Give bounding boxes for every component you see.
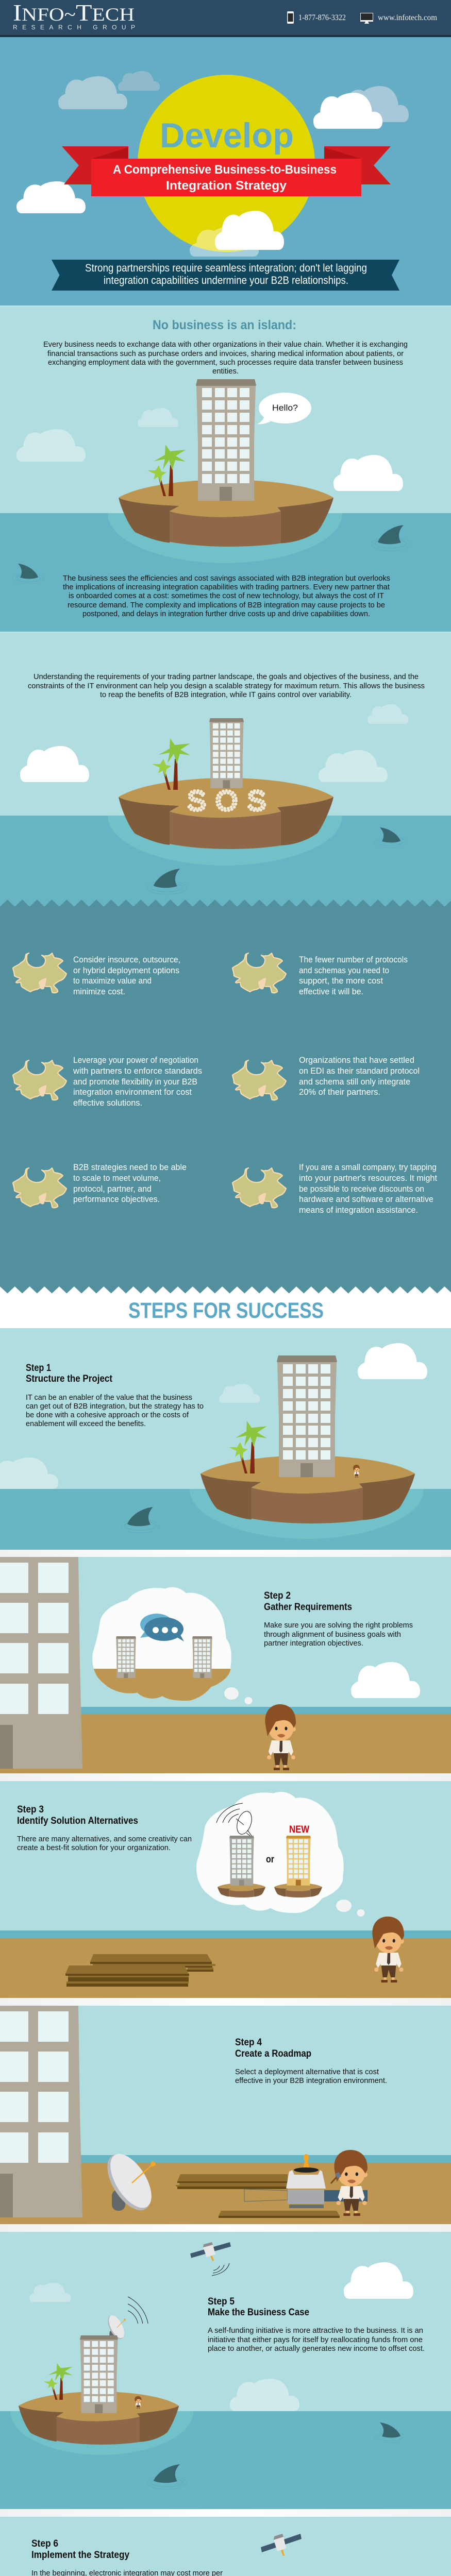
shark lower xyxy=(147,2464,187,2489)
step text: Step 6 xyxy=(31,2538,58,2549)
planks xyxy=(176,2174,340,2218)
step text: be done with a cohesive approach or the costs of xyxy=(26,1411,189,1419)
tip 2: and schemas you need to xyxy=(299,966,389,975)
tip 4: on EDI as their standard protocol xyxy=(299,1066,420,1076)
clouds xyxy=(16,408,403,491)
step text xyxy=(235,2037,387,2085)
person xyxy=(353,1465,360,1478)
cloud back right xyxy=(340,86,409,122)
person xyxy=(372,1917,404,1982)
tip 3: effective solutions. xyxy=(73,1098,142,1108)
red ribbon xyxy=(62,146,391,196)
body text: the implications of increasing integration capabilities with trading partners. Every new partner that xyxy=(63,583,390,591)
panel: step 1 xyxy=(0,1328,451,1550)
panel: teal tips xyxy=(0,900,451,1294)
or label: or xyxy=(266,1854,275,1865)
step text: Structure the Project xyxy=(26,1374,113,1384)
tip 6: hardware and software or alternative xyxy=(299,1195,433,1204)
speech bubble: Hello? xyxy=(272,403,298,413)
step text: through alignment of business goals with xyxy=(264,1631,401,1639)
step text: create a best-fit solution for your organization. xyxy=(17,1844,171,1852)
body text xyxy=(28,673,425,699)
SOS rocks: SOS xyxy=(187,785,266,817)
dish xyxy=(105,2313,127,2342)
satellite dish xyxy=(98,2147,160,2217)
body text: constraints of the IT environment can help you design a scalable strategy for maximum return. This allows the business xyxy=(28,682,425,690)
intro text: exchanging employment data with the government, such processes require data transfer between business xyxy=(48,359,403,367)
body text: resource demand. The complexity and implications of B2B integration may cause projects to be xyxy=(68,601,385,609)
subtitle: Integration Strategy xyxy=(166,179,287,193)
building xyxy=(277,1355,337,1477)
option B island xyxy=(274,1883,322,1897)
website: www.infotech.com xyxy=(378,13,438,22)
header bar xyxy=(0,0,451,37)
tip 6: If you are a small company, try tapping xyxy=(299,1163,437,1172)
body text: postponed, and delays in integration further drive costs up and drive capabilities down. xyxy=(82,610,370,618)
step text: Select a deployment alternative that is cost xyxy=(235,2068,379,2076)
tagline banner: integration capabilities undermine your B2B relationships. xyxy=(104,275,348,286)
heading: No business is an island: xyxy=(153,318,296,332)
small building right xyxy=(192,1636,212,1678)
satellite waves xyxy=(212,2263,229,2276)
satellite under construction xyxy=(286,2154,326,2208)
dish with waves xyxy=(216,1803,254,1836)
step text: Make the Business Case xyxy=(208,2307,309,2318)
island halo xyxy=(190,1489,424,1539)
tip 4: Organizations that have settled xyxy=(299,1056,414,1065)
tip 3: integration environment for cost xyxy=(73,1088,192,1097)
panel: hero sky xyxy=(0,37,451,306)
step text: can get out of B2B integration, but the strategy has to xyxy=(26,1402,204,1411)
tip 3: and promote flexibility in your B2B xyxy=(73,1077,197,1087)
intro text: entities. xyxy=(212,367,239,376)
subtitle xyxy=(113,163,337,193)
tip 1: to maximize value and xyxy=(73,976,152,986)
tip 2: The fewer number of protocols xyxy=(299,955,408,964)
waves xyxy=(128,2297,148,2324)
cloud small xyxy=(118,71,160,91)
body text: Understanding the requirements of your trading partner landscape, the goals and objectives of the business, and the xyxy=(34,673,419,681)
tip 2: support, the more cost xyxy=(299,976,383,986)
tip 5: B2B strategies need to be able xyxy=(73,1163,187,1172)
step text: initiative that either pays for itself by reallocating funds from one xyxy=(208,2336,423,2344)
island xyxy=(201,1455,415,1523)
tip 2: effective it will be. xyxy=(299,987,363,996)
island halo xyxy=(108,816,342,866)
tagline banner xyxy=(52,260,399,291)
tip 5 xyxy=(13,1163,187,1208)
tip 6: into your partner's resources. It might xyxy=(299,1174,437,1183)
panel: step 5 xyxy=(0,2232,451,2509)
step text: Create a Roadmap xyxy=(235,2048,311,2059)
speech bubble xyxy=(257,393,311,424)
clouds xyxy=(20,704,408,782)
body text: to reap the benefits of B2B integration, while IT gains control over variability. xyxy=(100,691,352,699)
step text: enablement will exceed the benefits. xyxy=(26,1420,146,1428)
island xyxy=(119,778,333,849)
intro text: Every business needs to exchange data with other organizations in their value chain. Whether it is exchanging xyxy=(43,341,408,349)
step text: A self-funding initiative is more attractive to the business. It is an xyxy=(208,2327,423,2335)
step text: Step 1 xyxy=(26,1363,51,1374)
intro text xyxy=(43,341,408,376)
person xyxy=(135,2396,141,2409)
building xyxy=(209,718,244,788)
step text xyxy=(31,2538,224,2576)
logo: RESEARCH GROUP xyxy=(13,24,135,31)
satellite xyxy=(261,2534,302,2556)
tip 4: 20% of their partners. xyxy=(299,1088,380,1097)
step text xyxy=(17,1804,192,1852)
shark right xyxy=(371,525,410,551)
tip 1: or hybrid deployment options xyxy=(73,966,179,975)
tip 2 xyxy=(232,953,408,996)
panel: step 3 xyxy=(0,1781,451,1998)
icon: speech bubbles xyxy=(140,1614,184,1641)
solar panel xyxy=(324,2190,368,2201)
shark right xyxy=(375,827,406,848)
cloud xyxy=(58,76,127,109)
logo: INFO~ TECH xyxy=(13,0,135,26)
step text: effective in your B2B integration environment. xyxy=(235,2077,387,2085)
tip 3: Leverage your power of negotiation xyxy=(73,1056,198,1065)
tip 3 xyxy=(13,1056,202,1108)
shark left xyxy=(147,869,187,894)
step text: IT can be an enabler of the value that the business xyxy=(26,1394,192,1402)
cloud white left xyxy=(16,181,86,213)
body text: The business sees the efficiencies and cost savings associated with B2B integration but overlooks xyxy=(63,574,390,583)
divider band xyxy=(0,2509,451,2517)
option A island xyxy=(218,1883,265,1897)
tip 6: be possible to receive discounts on xyxy=(299,1184,424,1194)
tip 1 xyxy=(13,953,180,996)
island halo xyxy=(108,513,342,563)
clouds xyxy=(29,2262,413,2411)
tip 3: with partners to enforce standards xyxy=(73,1066,202,1076)
tip 5: to scale to meet volume, xyxy=(73,1174,161,1183)
tip 5: performance objectives. xyxy=(73,1195,160,1204)
clouds xyxy=(0,1343,427,1489)
island xyxy=(19,2392,179,2445)
divider band xyxy=(0,1998,451,2006)
body text xyxy=(63,574,390,618)
palm trees xyxy=(229,1421,267,1473)
step text: Step 4 xyxy=(235,2037,262,2048)
step text xyxy=(264,1590,413,1648)
subtitle: A Comprehensive Business-to-Business xyxy=(113,163,337,177)
step text: partner integration objectives. xyxy=(264,1639,363,1648)
title: Develop: Develop xyxy=(160,116,294,155)
tagline banner: Strong partnerships require seamless integration; don't let lagging xyxy=(85,262,367,274)
sun xyxy=(138,75,315,252)
cloud white centre xyxy=(215,211,284,250)
small building left xyxy=(116,1636,136,1678)
panel: SOS island xyxy=(0,632,451,906)
palm trees xyxy=(147,445,186,496)
option A building xyxy=(229,1836,254,1886)
icon: monitor xyxy=(360,13,373,24)
step text: Implement the Strategy xyxy=(31,2550,129,2561)
phone number: 1-877-876-3322 xyxy=(298,13,346,22)
tip 4: and schema still only integrate xyxy=(299,1077,410,1087)
palm trees xyxy=(152,738,190,790)
building xyxy=(80,2335,118,2413)
thought cloud xyxy=(92,1587,253,1704)
thought cloud xyxy=(196,1792,365,1917)
palm trees xyxy=(43,2363,72,2400)
step text: Step 5 xyxy=(208,2296,235,2307)
NEW label: NEW xyxy=(289,1824,309,1835)
step text xyxy=(208,2296,425,2353)
panel: step 4 xyxy=(0,2006,451,2224)
island xyxy=(119,480,333,547)
divider band xyxy=(0,2224,451,2232)
step text: place to another, or actually generates new income to offset cost. xyxy=(208,2345,425,2353)
shark xyxy=(121,1507,160,1533)
intro text: financial transactions such as purchase orders and invoices, sharing medical information about patients, or xyxy=(47,350,404,358)
shark left xyxy=(13,564,43,584)
heading: steps for success: STEPS FOR SUCCESS xyxy=(128,1298,324,1323)
satellite xyxy=(190,2242,231,2261)
tip 1: minimize cost. xyxy=(73,987,125,996)
step text: Step 2 xyxy=(264,1590,291,1601)
person with hammer xyxy=(331,2150,368,2216)
step text: Step 3 xyxy=(17,1804,44,1815)
divider band xyxy=(0,1773,451,1781)
divider band xyxy=(0,1550,451,1557)
tip 5: protocol, partner, and xyxy=(73,1184,152,1194)
person xyxy=(265,1704,296,1770)
panel: step 2 xyxy=(0,1557,451,1773)
solar panel frame xyxy=(244,2189,288,2201)
island halo xyxy=(10,2411,193,2455)
panel: no business is an island xyxy=(0,306,451,632)
cloud translucent xyxy=(190,227,259,257)
tip 4 xyxy=(232,1056,420,1100)
cloud white right xyxy=(313,93,382,129)
tip 1: Consider insource, outsource, xyxy=(73,955,180,964)
large building xyxy=(0,2006,82,2217)
step text xyxy=(26,1363,204,1428)
planks xyxy=(65,1954,215,1987)
cloud xyxy=(351,1662,420,1698)
building xyxy=(196,379,256,501)
option B building xyxy=(286,1836,311,1886)
step text: Identify Solution Alternatives xyxy=(17,1816,138,1826)
step text: There are many alternatives, and some creativity can xyxy=(17,1835,192,1843)
step text: Gather Requirements xyxy=(264,1602,352,1613)
tip 6: means of integration assistance. xyxy=(299,1206,418,1215)
body text: is onboarded comes at a cost: sometimes the cost of new technology, but always the cost of IT xyxy=(69,592,384,600)
shark right xyxy=(375,2422,406,2443)
icon: phone xyxy=(287,11,294,24)
panel: step 6 xyxy=(0,2517,451,2576)
step text: Make sure you are solving the right problems xyxy=(264,1621,413,1630)
large building xyxy=(0,1557,82,1769)
tip 6 xyxy=(232,1163,437,1215)
